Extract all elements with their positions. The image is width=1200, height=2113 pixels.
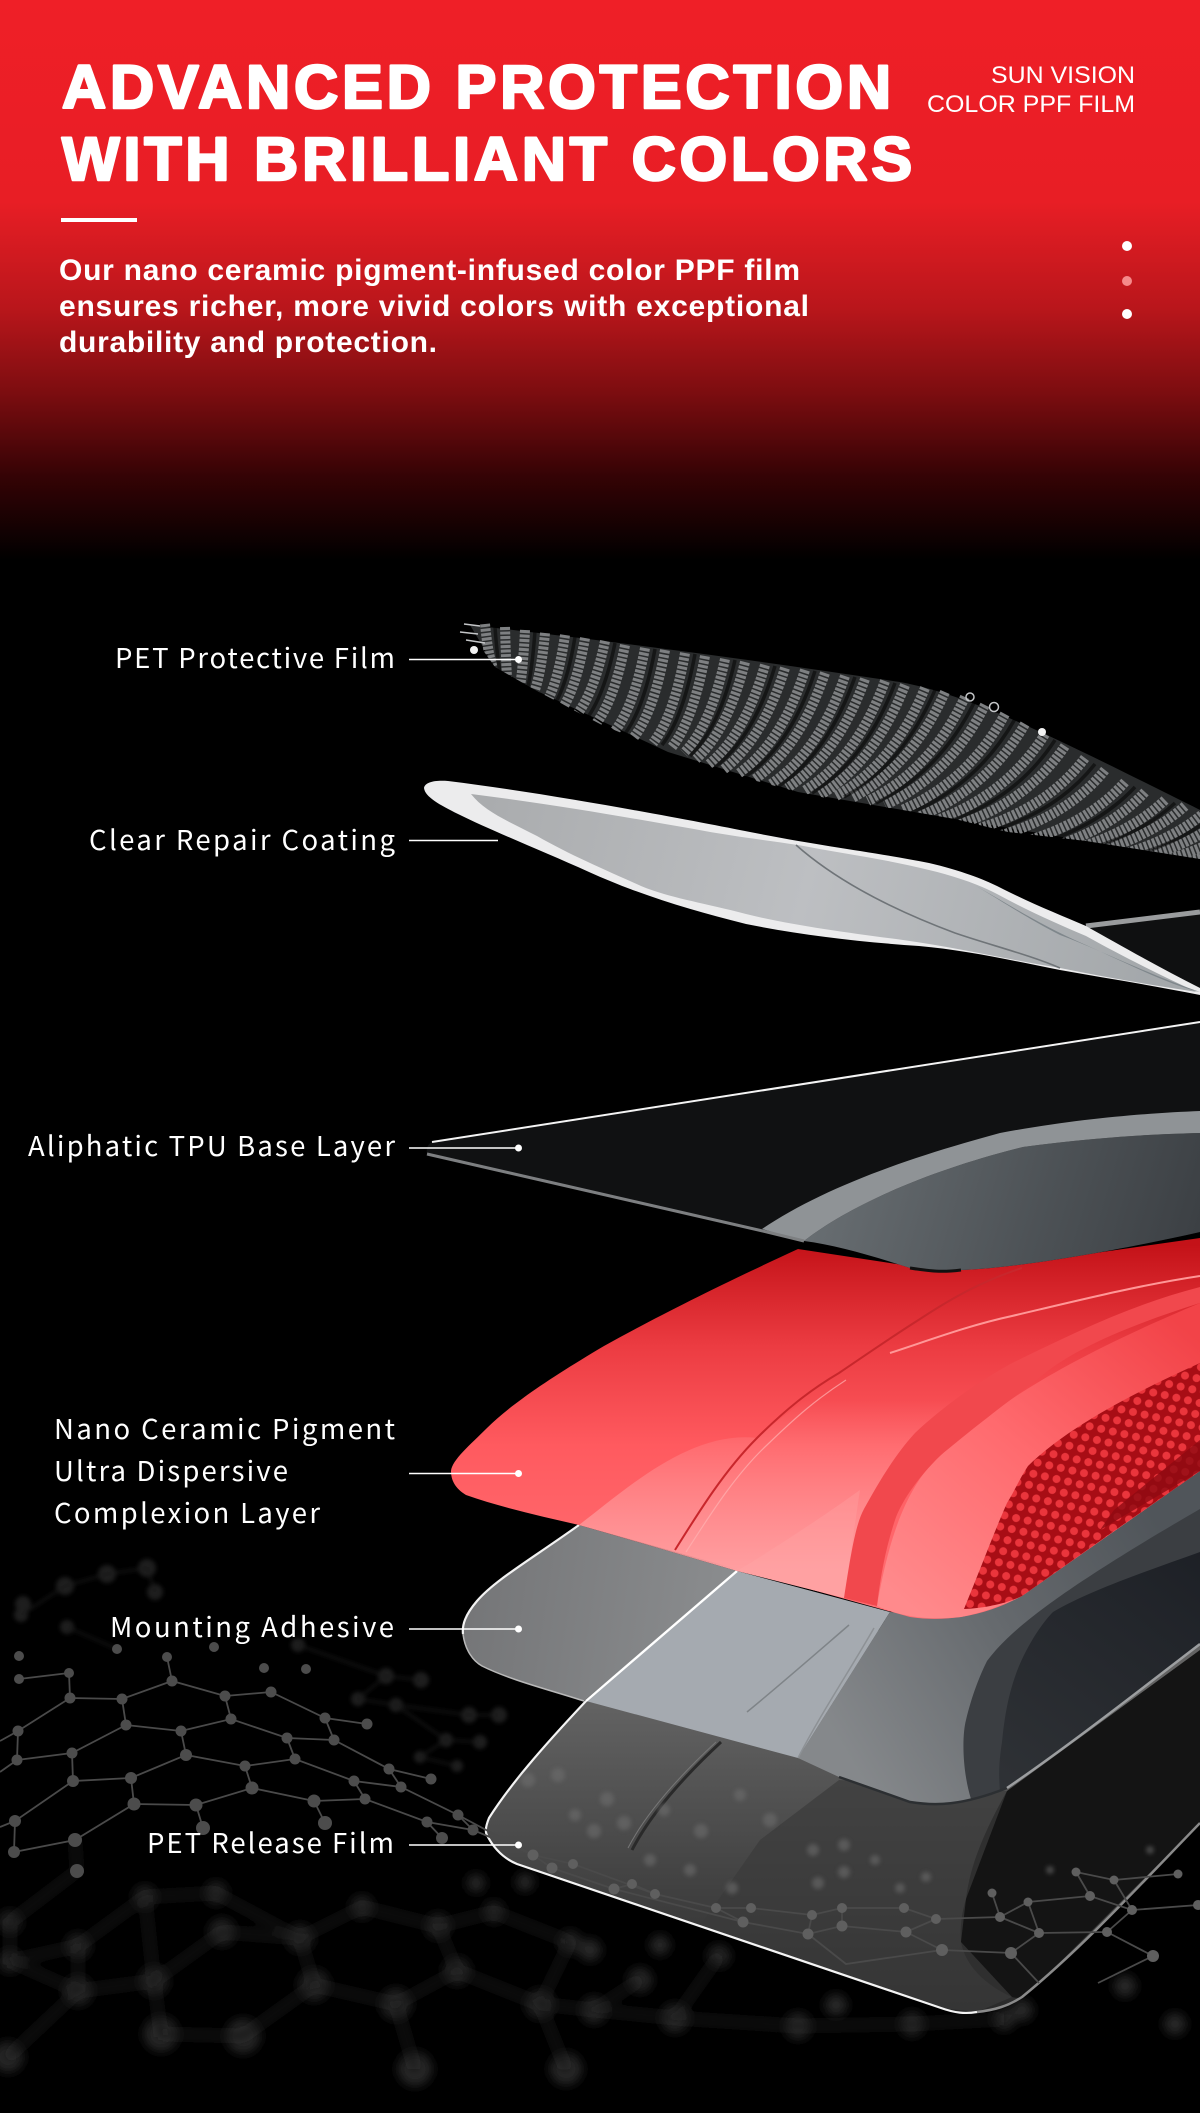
layer: PET release film xyxy=(486,1571,1200,2013)
intro paragraph: Our nano ceramic pigment-infused color PPF film xyxy=(59,254,800,287)
hexagonal mesh: sharp nodes xyxy=(0,1642,1200,1983)
intro paragraph: ensures richer, more vivid colors with exceptional xyxy=(59,290,809,323)
layer: PET protective mesh film xyxy=(460,624,1200,870)
label: Clear Repair Coating: Clear Repair Coating xyxy=(89,818,395,858)
label: PET Release Film xyxy=(147,1821,522,1861)
hexagonal mesh: blurred background xyxy=(0,1559,1186,2086)
label: Aliphatic TPU Base Layer: Aliphatic TPU Base Layer xyxy=(28,1124,395,1164)
label: Nano Ceramic Pigment Ultra Dispersive Complexion Layer: Ultra Dispersive xyxy=(54,1449,288,1489)
title xyxy=(62,53,912,193)
layer: mounting adhesive xyxy=(463,1471,1200,1804)
intro paragraph: durability and protection. xyxy=(59,326,437,359)
layer: aliphatic TPU base layer xyxy=(427,1022,1200,1271)
pagination dots xyxy=(1122,241,1132,319)
label: Nano Ceramic Pigment Ultra Dispersive Complexion Layer: Nano Ceramic Pigment xyxy=(54,1407,395,1447)
title: WITH BRILLIANT COLORS xyxy=(62,125,912,193)
top right brand text: COLOR PPF FILM xyxy=(927,91,1135,118)
label: Nano Ceramic Pigment Ultra Dispersive Complexion Layer: Complexion Layer xyxy=(54,1491,320,1531)
label: Mounting Adhesive xyxy=(110,1605,522,1645)
background gradient xyxy=(0,0,1200,560)
layer: clear repair coating xyxy=(424,781,1200,995)
label: PET Release Film: PET Release Film xyxy=(147,1821,394,1861)
label: PET Protective Film: PET Protective Film xyxy=(115,636,395,676)
title: ADVANCED PROTECTION xyxy=(62,53,891,121)
intro paragraph xyxy=(59,254,809,359)
layer: nano ceramic pigment red film xyxy=(451,1238,1200,1619)
label: Mounting Adhesive: Mounting Adhesive xyxy=(110,1605,394,1645)
top right brand text: SUN VISION xyxy=(991,62,1135,89)
label: Nano Ceramic Pigment Ultra Dispersive Complexion Layer xyxy=(54,1407,522,1531)
heading rule xyxy=(61,218,137,222)
top right brand text xyxy=(927,62,1135,118)
label: PET Protective Film xyxy=(115,636,522,676)
